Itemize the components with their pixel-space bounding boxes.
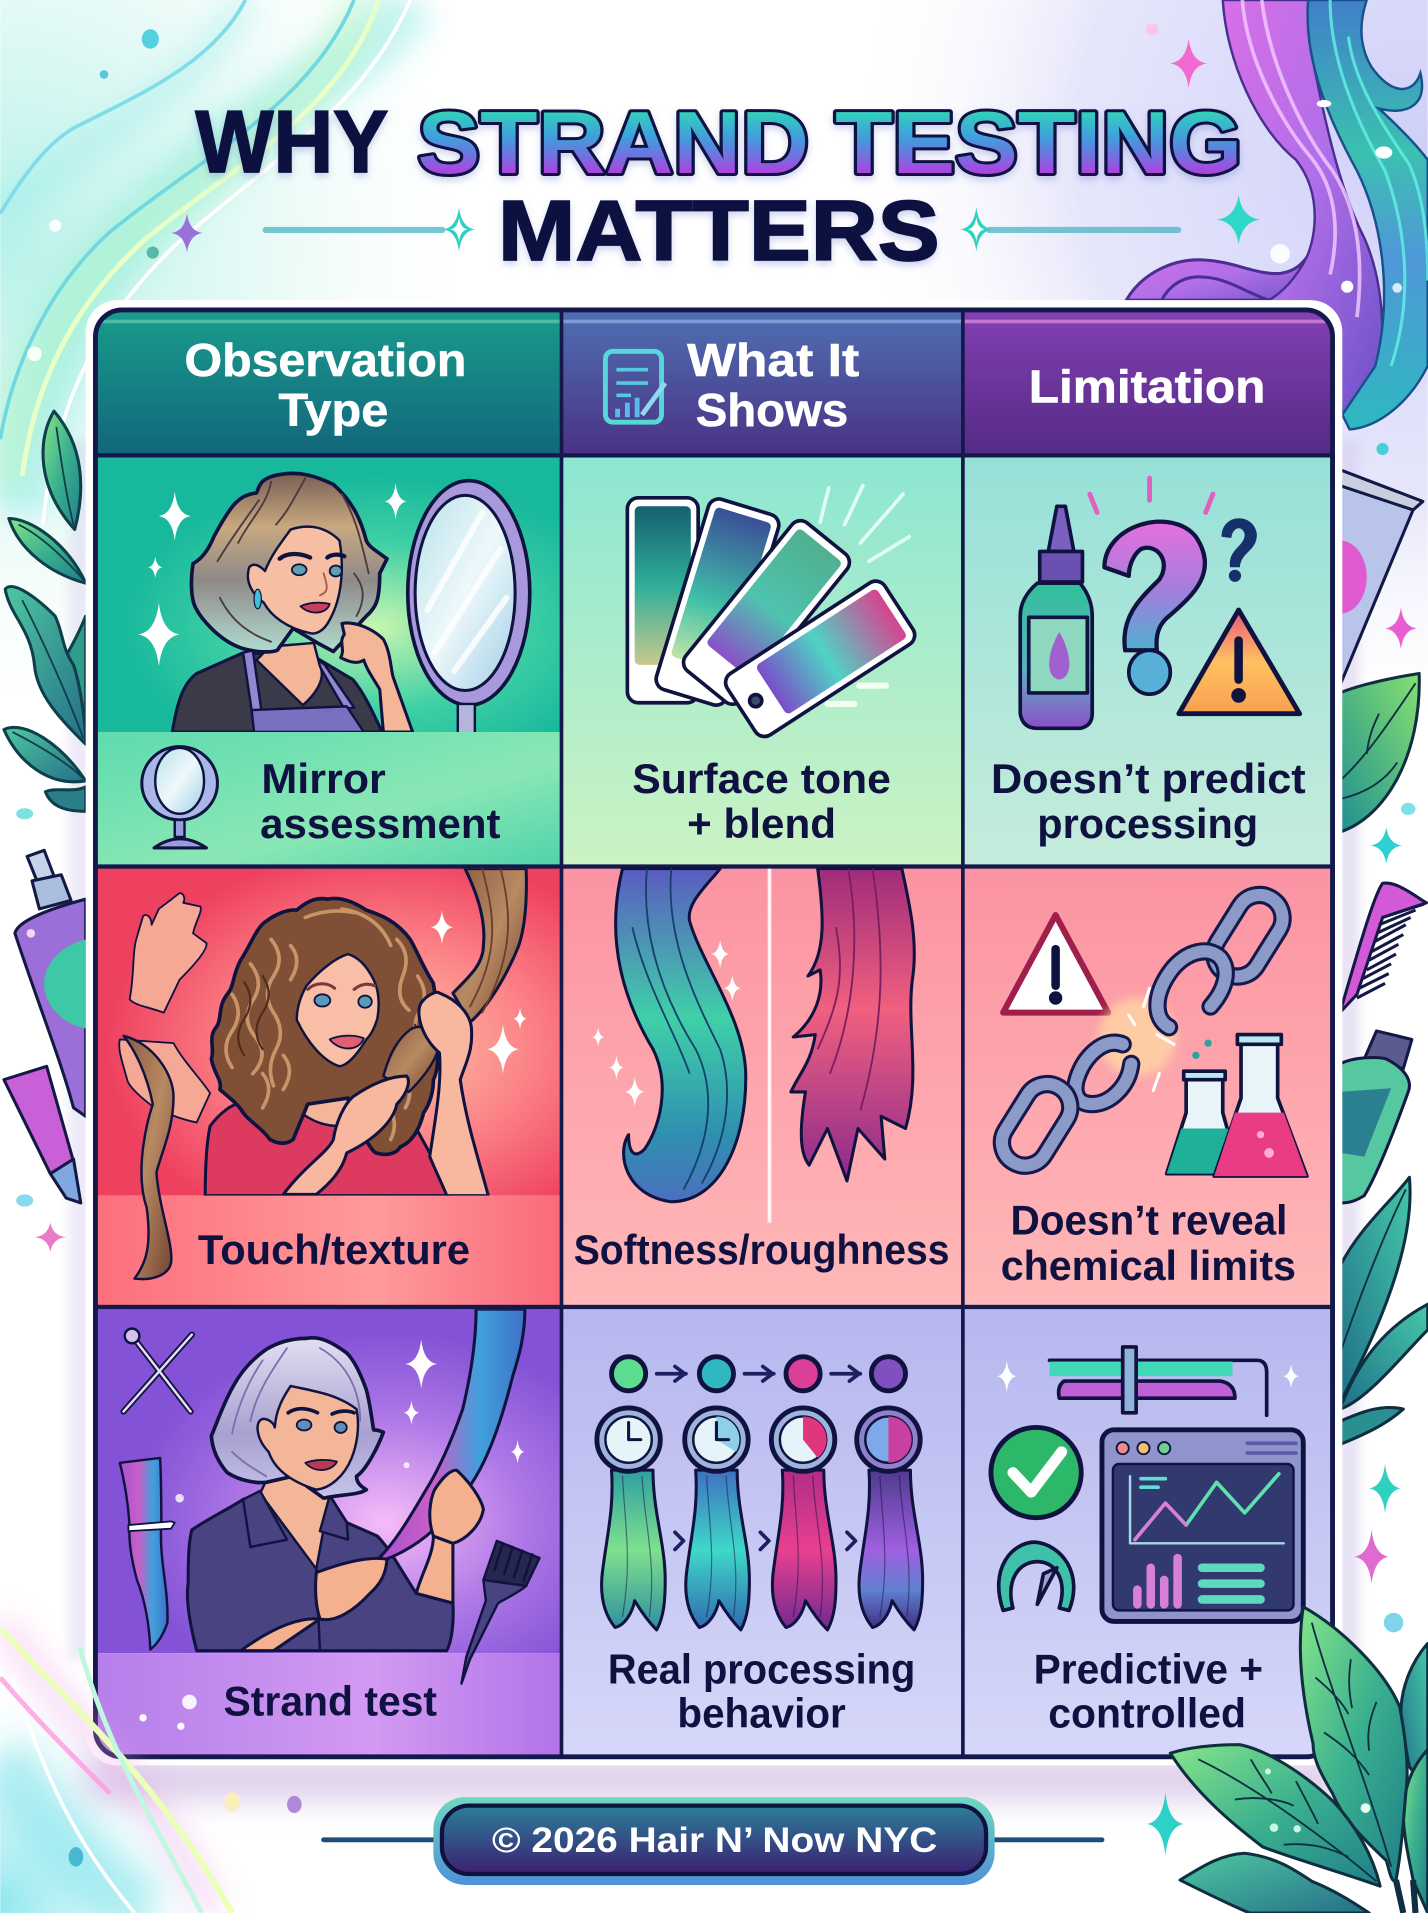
- illustration: controlled test dashboard: [991, 1347, 1303, 1621]
- captions: Doesn’t reveal: [1010, 1197, 1287, 1244]
- bottom right leaves: [1147, 1607, 1428, 1913]
- flowing hair top right: [1126, 0, 1428, 455]
- panel: header row: [95, 310, 1333, 455]
- illustration: woman at mirror: [138, 473, 530, 738]
- panel: header row: What It: [687, 334, 859, 386]
- captions: assessment: [260, 800, 501, 847]
- sparkle dots in strand test caption: [139, 1695, 197, 1730]
- captions: chemical limits: [1001, 1242, 1296, 1289]
- title: MATTERS: [498, 184, 940, 279]
- panel: row 2 touch texture: [95, 866, 1333, 1307]
- captions: Real processing: [608, 1646, 915, 1693]
- footer line: [321, 1837, 1104, 1842]
- panel: row 1 mirror assessment: [95, 455, 1333, 866]
- aurora swirl bottom left: [0, 1623, 302, 1913]
- illustration: bottle question warning: [1020, 478, 1300, 728]
- left hair products: [4, 808, 86, 1252]
- title: STRAND TESTING: [418, 93, 1242, 192]
- right leaves: [1340, 673, 1428, 1632]
- captions: Touch/texture: [198, 1226, 470, 1273]
- table grid lines: [95, 310, 1333, 1757]
- captions: processing: [1037, 800, 1258, 847]
- panel: header row: Type: [278, 384, 388, 436]
- left leaves: [4, 411, 86, 811]
- illustration: left hair strand: [124, 1036, 174, 1279]
- captions: Strand test: [224, 1677, 437, 1724]
- captions: Mirror: [261, 755, 386, 802]
- diagram: processing sequence: [597, 1357, 923, 1630]
- main table card: [86, 300, 1342, 1765]
- panel: header row: Observation: [185, 334, 466, 386]
- captions: Surface tone: [632, 755, 891, 802]
- footer badge: © 2026 Hair N’ Now NYC: [492, 1821, 937, 1860]
- illustration: broken chain and flasks: [993, 886, 1307, 1176]
- icon: tint brush: [461, 1541, 540, 1684]
- aurora swirl top left: [0, 0, 410, 525]
- title divider right: [960, 207, 1181, 251]
- panel: header row: Shows: [696, 384, 848, 436]
- footer badge: [433, 1797, 995, 1885]
- title divider left: [263, 207, 475, 251]
- illustration: swatch fan: [627, 486, 919, 741]
- captions: + blend: [687, 800, 836, 847]
- captions: Softness/roughness: [574, 1226, 949, 1273]
- sparkles top: [171, 23, 1261, 253]
- panel: row 3 strand test: [95, 1307, 1333, 1757]
- panel: header row: Limitation: [1029, 361, 1265, 413]
- title: [195, 92, 1242, 279]
- captions: behavior: [677, 1690, 846, 1737]
- title: WHY: [195, 92, 388, 191]
- captions: controlled: [1048, 1690, 1246, 1737]
- captions: [198, 755, 1306, 1737]
- illustration: soft versus rough hair: [592, 869, 914, 1222]
- captions: Predictive +: [1034, 1646, 1263, 1693]
- captions: Doesn’t predict: [991, 755, 1306, 802]
- icon: small mirror: [142, 747, 217, 848]
- illustration: woman touching hair: [119, 869, 527, 1196]
- right hair products: [1313, 470, 1426, 1203]
- illustration: woman with color strand: [120, 1309, 525, 1651]
